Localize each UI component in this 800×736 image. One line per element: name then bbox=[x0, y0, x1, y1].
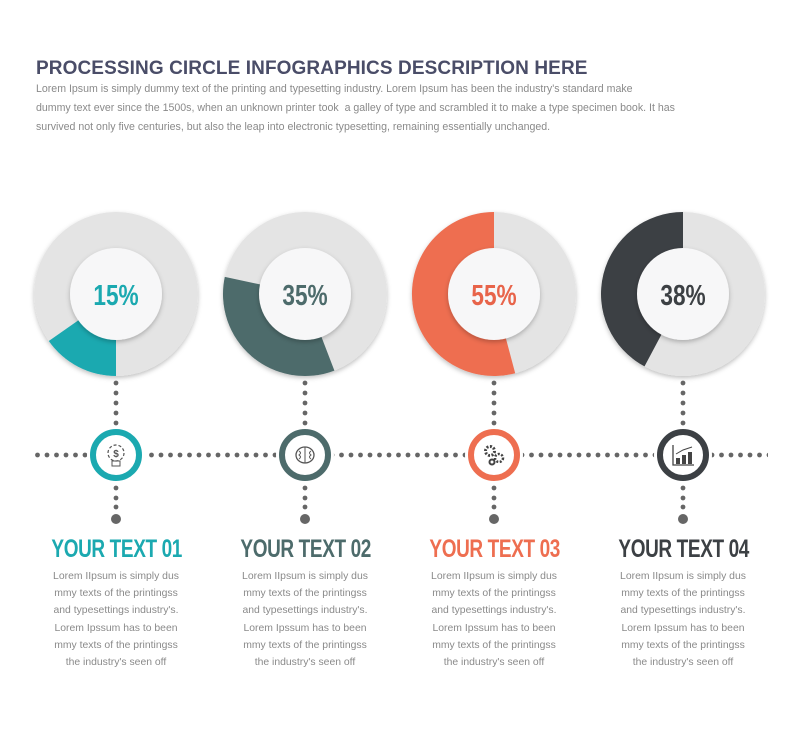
description text: dummy text ever since the 1500s, when an unknown printer took a galley of type and scrambled it to make a type specimen book. It has bbox=[36, 102, 675, 114]
donut 1: 15% bbox=[93, 278, 139, 312]
column 3: the industry's seen off bbox=[444, 657, 544, 668]
column 1: Lorem Ipssum has to been bbox=[54, 623, 178, 634]
donut 1 bbox=[34, 212, 198, 376]
column 1: Lorem IIpsum is simply dus bbox=[53, 571, 179, 582]
column 3: and typesettings industry's. bbox=[431, 605, 556, 616]
column 2: mmy texts of the printingss bbox=[243, 588, 367, 599]
donut 3 bbox=[412, 212, 576, 376]
timeline dotted line bbox=[33, 450, 768, 460]
column 4 bbox=[618, 535, 750, 668]
column 1: mmy texts of the printingss bbox=[54, 640, 178, 651]
column 3: Lorem IIpsum is simply dus bbox=[431, 571, 557, 582]
column 4: the industry's seen off bbox=[633, 657, 733, 668]
column 2: Lorem Ipssum has to been bbox=[243, 623, 367, 634]
description text: Lorem Ipsum is simply dummy text of the printing and typesetting industry. Lorem Ipsum has been the industry's standard make bbox=[36, 83, 633, 95]
description text: survived not only five centuries, but also the leap into electronic typesetting, remaining essentially unchanged. bbox=[36, 121, 550, 133]
donut 4: 38% bbox=[660, 278, 706, 312]
column 3: mmy texts of the printingss bbox=[432, 640, 556, 651]
column 3: mmy texts of the printingss bbox=[432, 588, 556, 599]
column 1: YOUR TEXT 01 bbox=[51, 535, 182, 563]
column 1: the industry's seen off bbox=[66, 657, 166, 668]
icon: money gear bulb bbox=[87, 426, 145, 484]
donut 2 bbox=[223, 212, 387, 376]
column 4: YOUR TEXT 04 bbox=[618, 535, 749, 563]
donut 4 bbox=[601, 212, 765, 376]
donut 3: 55% bbox=[471, 278, 517, 312]
donut 2: 35% bbox=[282, 278, 328, 312]
column 3: YOUR TEXT 03 bbox=[429, 535, 560, 563]
column 2: mmy texts of the printingss bbox=[243, 640, 367, 651]
column 3 bbox=[429, 535, 560, 668]
column 2 bbox=[240, 535, 371, 668]
column 3: Lorem Ipssum has to been bbox=[432, 623, 556, 634]
icon: bar chart bbox=[654, 426, 712, 484]
icon: gears bbox=[465, 426, 523, 484]
column 2: YOUR TEXT 02 bbox=[240, 535, 371, 563]
column 1 bbox=[51, 535, 182, 668]
column 4: mmy texts of the printingss bbox=[621, 640, 745, 651]
column 4: mmy texts of the printingss bbox=[621, 588, 745, 599]
connectors and nodes bbox=[111, 381, 688, 524]
column 4: Lorem Ipssum has to been bbox=[621, 623, 745, 634]
column 4: Lorem IIpsum is simply dus bbox=[620, 571, 746, 582]
title: PROCESSING CIRCLE INFOGRAPHICS DESCRIPTION HERE bbox=[36, 58, 588, 79]
column 2: and typesettings industry's. bbox=[242, 605, 368, 616]
column 4: and typesettings industry's. bbox=[620, 605, 746, 616]
column 1: mmy texts of the printingss bbox=[54, 588, 178, 599]
column 2: the industry's seen off bbox=[255, 657, 355, 668]
column 2: Lorem IIpsum is simply dus bbox=[242, 571, 368, 582]
description text bbox=[36, 83, 675, 133]
column 1: and typesettings industry's. bbox=[53, 605, 178, 616]
icon: money gear bulb: $ bbox=[113, 449, 119, 460]
icon: brain bbox=[276, 426, 334, 484]
